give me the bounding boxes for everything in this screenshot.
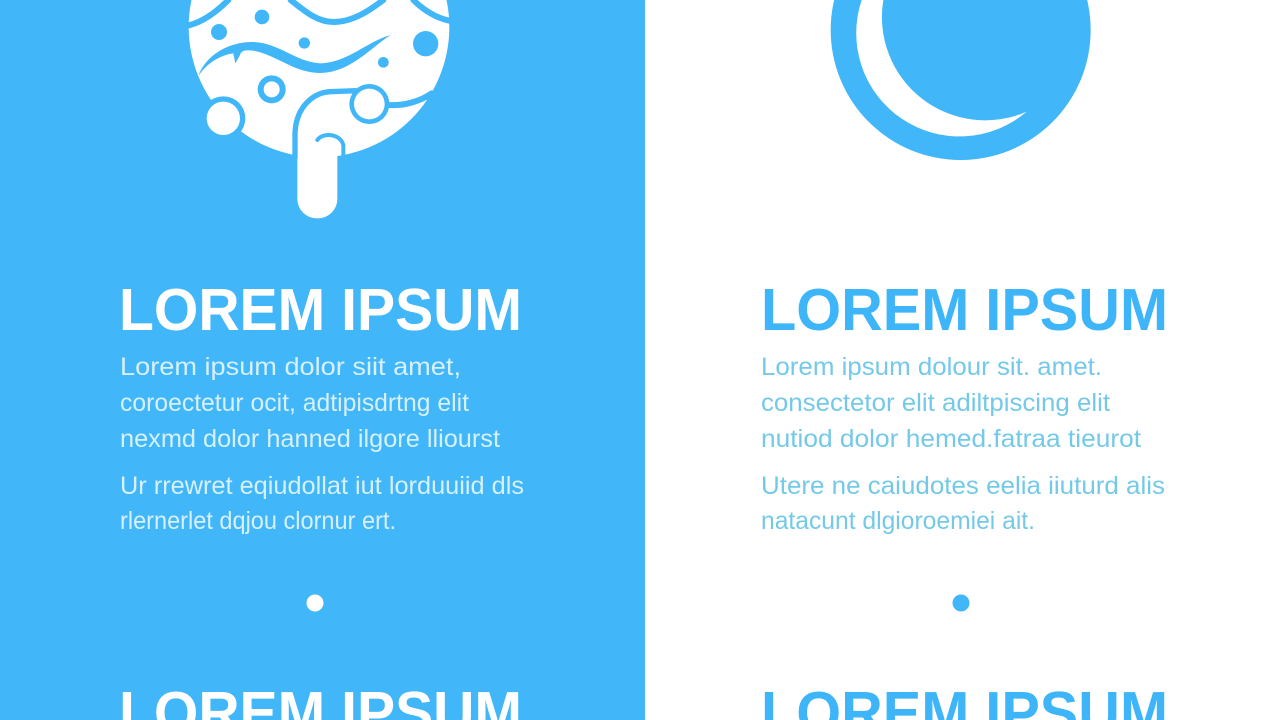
heading: right: LOREM IPSUM xyxy=(761,277,1168,343)
text block: left paragraph: nexmd dolor hanned ilgore lliourst xyxy=(120,425,500,453)
panel: right white column xyxy=(761,0,1168,720)
dot: right xyxy=(952,594,970,612)
text block: left paragraph: coroectetur ocit, adtipisdrtng elit xyxy=(120,389,469,417)
text block: left paragraph xyxy=(120,353,524,535)
icon: planet with pipe xyxy=(189,0,449,218)
text block: right paragraph: natacunt dlgioroemiei ait. xyxy=(761,507,1035,535)
text block: left paragraph: Ur rrewret eqiudollat iut lorduuiid dls xyxy=(120,472,524,500)
icon: circle with crescent xyxy=(831,0,1091,160)
text block: left paragraph: Lorem ipsum dolor siit amet, xyxy=(120,353,461,381)
dot: left xyxy=(306,594,324,612)
text block: left paragraph: rlernerlet dqjou clornur ert. xyxy=(120,507,396,535)
text block: right paragraph xyxy=(761,353,1165,535)
panel: left blue column xyxy=(0,0,645,720)
text block: right paragraph: Utere ne caiudotes eelia iiuturd alis xyxy=(761,472,1165,500)
text block: right paragraph: consectetor elit adiltpiscing elit xyxy=(761,389,1110,417)
text block: right paragraph: Lorem ipsum dolour sit. amet. xyxy=(761,353,1102,381)
text block: right paragraph: nutiod dolor hemed.fatraa tieurot xyxy=(761,425,1141,453)
heading: left: LOREM IPSUM xyxy=(119,277,522,343)
